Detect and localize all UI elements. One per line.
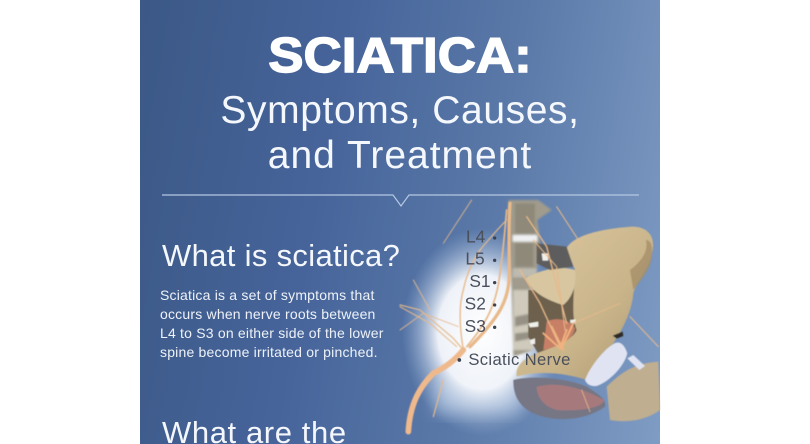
subtitle: and treatment: and Treatment xyxy=(268,134,532,177)
text block: sciatica definition: L4 to S3 on either side of the lower xyxy=(160,325,384,341)
text block: sciatica definition: spine become irritated or pinched. xyxy=(160,344,378,360)
label: Sciatic Nerve: Sciatic Nerve xyxy=(468,350,571,369)
white glow behind spine xyxy=(402,228,562,436)
label: S2: S2 xyxy=(465,294,486,314)
label marker dots xyxy=(457,236,496,362)
sciatic nerve bundle xyxy=(400,200,658,432)
heading: what is sciatica: What is sciatica? xyxy=(162,238,400,273)
text block: sciatica definition: occurs when nerve roots between xyxy=(160,306,376,322)
panel: infographic background xyxy=(140,0,660,444)
title: SCIATICA: SCIATICA: xyxy=(268,29,532,83)
hip socket and femur xyxy=(513,343,660,421)
text block: sciatica definition: Sciatica is a set of symptoms that xyxy=(160,287,375,303)
label: S3: S3 xyxy=(465,316,486,336)
label: L5: L5 xyxy=(465,249,485,269)
label: S1: S1 xyxy=(469,271,491,291)
subtitle: symptoms, causes: Symptoms, Causes, xyxy=(220,89,580,132)
spinal labels xyxy=(465,226,571,369)
divider line with notch xyxy=(162,195,639,206)
text block: sciatica definition xyxy=(160,287,384,360)
pelvis bone xyxy=(516,227,653,380)
label: L4: L4 xyxy=(466,226,486,246)
spine vertebrae xyxy=(508,200,552,357)
